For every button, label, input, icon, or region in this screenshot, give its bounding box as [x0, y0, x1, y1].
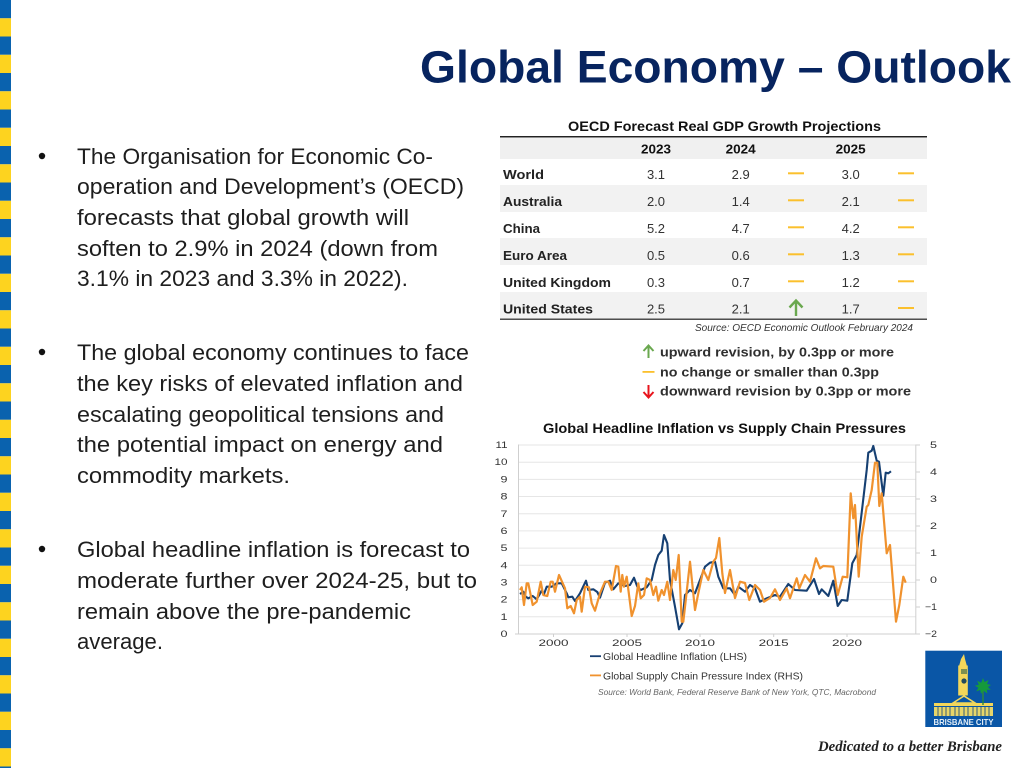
- chart source: Source: World Bank, Federal Reserve Bank of New York, QTC, Macrobond: [598, 687, 876, 697]
- x axis labels: 2010: [685, 638, 715, 649]
- row labels: Australia: [503, 194, 563, 209]
- left axis labels: 3: [500, 578, 508, 588]
- bullet 2: key risks: the key risks of elevated inflation and: [77, 371, 463, 396]
- table values: 0.3: [647, 275, 665, 290]
- table: GDP projections: [500, 136, 927, 320]
- bullet 1: global growth: 3.1% in 2023 and 3.3% in 2022).: [77, 266, 408, 291]
- left axis labels: 0: [500, 629, 508, 640]
- bullet 3: headline inflation: Global headline inflation is forecast to: [77, 537, 470, 562]
- right axis labels: [925, 440, 937, 640]
- right axis labels: −2: [925, 629, 937, 640]
- right axis labels: −1: [925, 602, 937, 613]
- table values: 1.3: [842, 248, 860, 263]
- right axis labels: 0: [930, 575, 937, 586]
- right axis labels: 1: [930, 548, 937, 559]
- left axis labels: 8: [500, 492, 508, 502]
- line: global supply chain pressure index: [520, 463, 906, 622]
- tagline: Dedicated to a better Brisbane: [817, 739, 1002, 755]
- icon: legend down arrow: [644, 385, 654, 398]
- legend: revisions: upward revision, by 0.3pp or more: [660, 344, 894, 360]
- bullet 3: headline inflation: average.: [77, 629, 163, 654]
- right axis labels: 2: [930, 521, 937, 532]
- table header years: 2024: [726, 142, 756, 156]
- table values: 1.2: [842, 275, 860, 290]
- row labels: World: [503, 167, 544, 182]
- table header years: 2025: [836, 142, 866, 156]
- tower: [958, 654, 968, 696]
- row labels: [503, 167, 611, 316]
- title: Global Economy – Outlook: [420, 42, 1012, 92]
- table values: 0.7: [732, 275, 750, 290]
- line: global headline inflation: [520, 446, 891, 629]
- table values: 5.2: [647, 221, 665, 236]
- row labels: United Kingdom: [503, 275, 611, 290]
- row labels: United States: [503, 302, 593, 316]
- icon: legend dash: [642, 371, 654, 373]
- table values: 2.5: [647, 302, 665, 316]
- left axis labels: [494, 440, 508, 640]
- left axis labels: 1: [500, 612, 508, 623]
- bullet 2: key risks: escalating geopolitical tensions and: [77, 402, 444, 427]
- line chart: inflation vs supply chain pressures: [494, 440, 937, 649]
- bullet 1: global growth: [39, 144, 464, 291]
- left axis labels: 10: [494, 457, 508, 468]
- table values: 2.9: [732, 167, 750, 182]
- bullet 1: global growth: operation and Development’s (OECD): [77, 174, 464, 199]
- logo: Brisbane City: BRISBANE CITY: [934, 718, 994, 727]
- bullet 1: global growth: forecasts that global growth will: [77, 205, 409, 230]
- chart legend: Global Headline Inflation (LHS): [603, 651, 747, 663]
- row labels: China: [503, 221, 541, 236]
- table header years: 2023: [641, 142, 671, 156]
- bullet 3: headline inflation: remain above the pre-pandemic: [77, 599, 411, 624]
- table values: 3.0: [842, 167, 860, 182]
- table values: 3.1: [647, 167, 665, 182]
- table values: 2.0: [647, 194, 665, 209]
- right axis labels: 4: [930, 467, 937, 478]
- table values: 2.1: [732, 302, 750, 316]
- palm: [975, 678, 991, 705]
- table values: 0.6: [732, 248, 750, 263]
- left axis labels: 5: [500, 543, 508, 554]
- right axis labels: 5: [930, 440, 937, 451]
- bullet 1: global growth: soften to 2.9% in 2024 (down from: [77, 236, 438, 261]
- building: [953, 696, 975, 703]
- table header years: [641, 142, 866, 156]
- left axis labels: 9: [500, 474, 508, 486]
- table source: Source: OECD Economic Outlook February 2024: [695, 322, 913, 334]
- table values: 1.7: [842, 302, 860, 316]
- logo: Brisbane City: [925, 651, 1002, 727]
- chart axes: [515, 444, 920, 637]
- icon: legend up arrow: [644, 346, 654, 358]
- x axis labels: 2020: [832, 638, 862, 649]
- legend: revisions: [642, 344, 911, 398]
- bullet 2: key risks: commodity markets.: [77, 463, 290, 488]
- left axis labels: 4: [500, 560, 508, 572]
- table values: 1.4: [732, 194, 750, 209]
- table values: [647, 167, 860, 316]
- icon: green up arrow: [790, 300, 802, 316]
- right axis labels: 3: [930, 494, 937, 505]
- x axis labels: 2005: [612, 638, 642, 649]
- x axis labels: 2000: [538, 638, 568, 649]
- row labels: Euro Area: [503, 248, 568, 263]
- bullet 2: key risks: [39, 340, 469, 488]
- table values: 0.5: [647, 248, 665, 263]
- text block: bullets: [39, 144, 477, 654]
- chart heading: Global Headline Inflation vs Supply Chain Pressures: [543, 421, 906, 436]
- legend: revisions: no change or smaller than 0.3pp: [660, 364, 879, 380]
- left decorative stripe: [0, 0, 11, 768]
- table heading: OECD Forecast Real GDP Growth Projections: [568, 119, 881, 134]
- table values: 2.1: [842, 194, 860, 209]
- chart legend: [590, 651, 803, 682]
- revision dashes: [788, 172, 914, 309]
- bullet 2: key risks: The global economy continues to face: [77, 340, 469, 365]
- bullet 3: headline inflation: moderate further over 2024-25, but to: [77, 568, 477, 593]
- table values: 4.7: [732, 221, 750, 236]
- x axis labels: 2015: [759, 638, 789, 649]
- x axis labels: [538, 638, 862, 649]
- table values: 4.2: [842, 221, 860, 236]
- bullet 3: headline inflation: [39, 537, 477, 654]
- bullet 2: key risks: the potential impact on energy and: [77, 432, 443, 457]
- chart legend: Global Supply Chain Pressure Index (RHS): [603, 670, 803, 682]
- legend: revisions: downward revision by 0.3pp or more: [660, 384, 911, 398]
- left axis labels: 7: [500, 509, 508, 520]
- left axis labels: 11: [496, 440, 508, 451]
- left axis labels: 6: [500, 526, 508, 537]
- left axis labels: 2: [500, 594, 508, 606]
- bullet 1: global growth: The Organisation for Economic Co-: [77, 144, 433, 169]
